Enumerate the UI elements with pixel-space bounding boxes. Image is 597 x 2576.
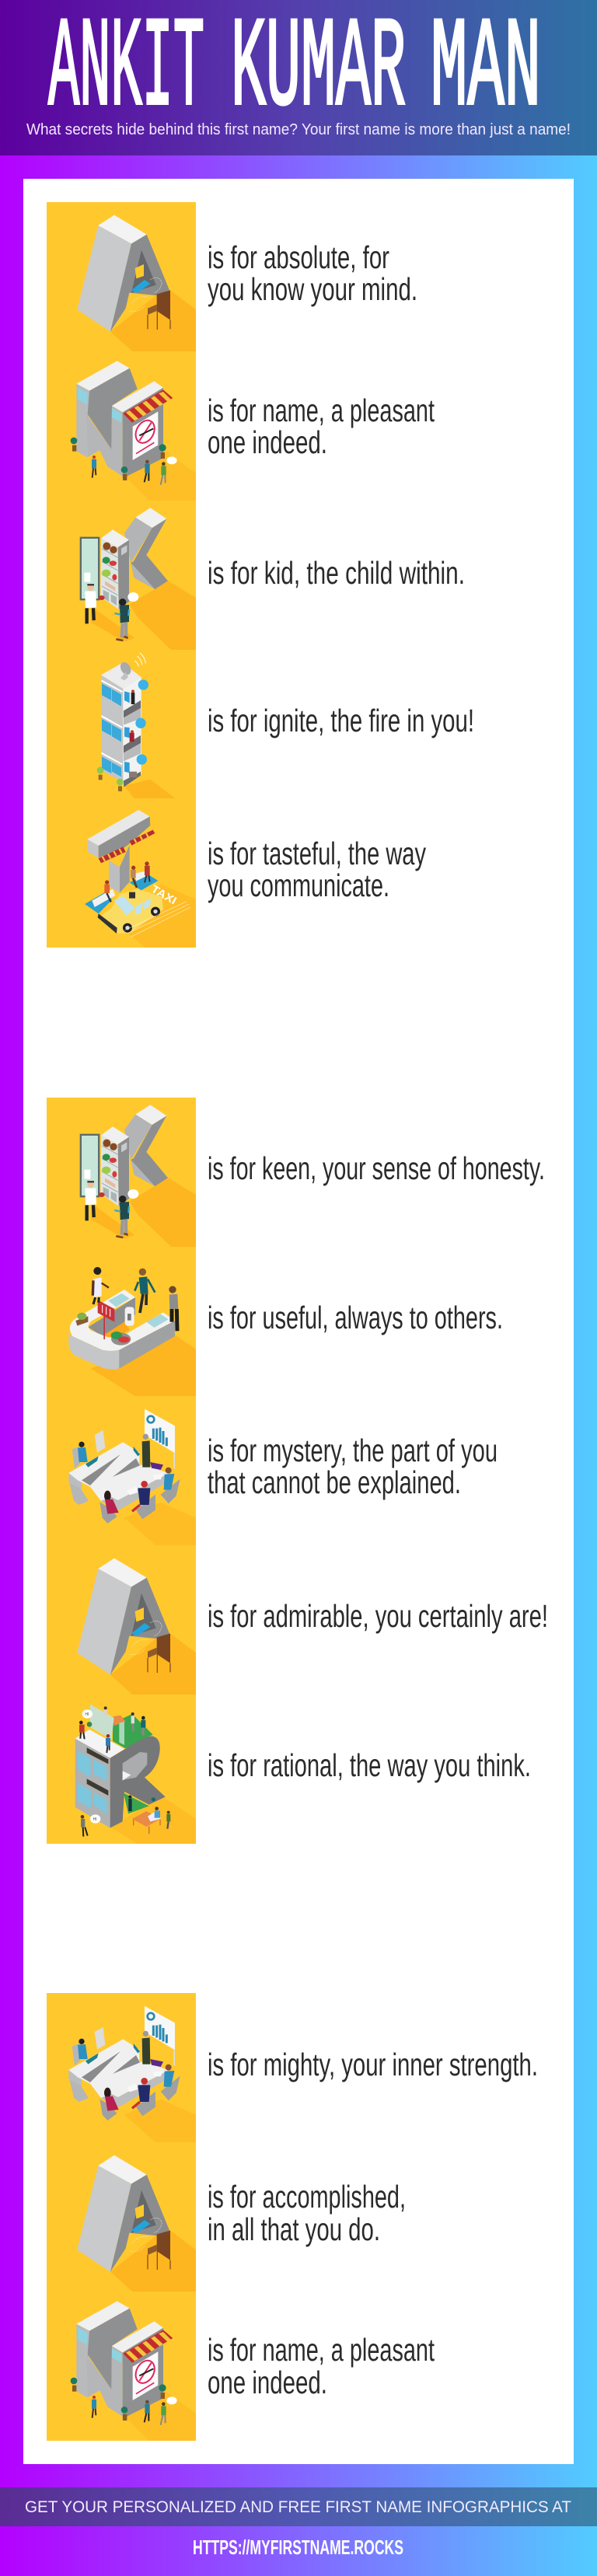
row: T is for tasteful: you communicate. bbox=[208, 867, 389, 903]
row: A is for absolute bbox=[47, 202, 417, 351]
header band bbox=[0, 0, 597, 155]
row: I is for ignite bbox=[47, 650, 474, 799]
row: N is for name: one indeed. bbox=[208, 424, 327, 460]
footer band bbox=[0, 2487, 597, 2526]
row: K is for keen bbox=[47, 1098, 545, 1247]
title: ANKIT bbox=[48, 0, 204, 141]
row: I is for ignite: is for ignite, the fire in you! bbox=[208, 703, 474, 738]
row: A is for accomplished bbox=[47, 2142, 406, 2292]
section: ANKIT bbox=[47, 202, 474, 948]
row: N is for name: is for name, a pleasant bbox=[208, 393, 435, 428]
row: M is for mystery: that cannot be explained. bbox=[208, 1464, 461, 1500]
row: N is for name bbox=[47, 2292, 435, 2441]
footer call to action: GET YOUR PERSONALIZED AND FREE FIRST NAME INFOGRAPHICS AT bbox=[25, 2498, 571, 2516]
row: A is for admirable bbox=[47, 1545, 548, 1695]
row: K is for kid: is for kid, the child within. bbox=[208, 555, 465, 591]
row: T is for tasteful bbox=[47, 798, 426, 948]
section: KUMAR bbox=[47, 1098, 548, 1844]
subtitle: What secrets hide behind this first name? Your first name is more than just a name! bbox=[26, 121, 571, 138]
section: MAN bbox=[47, 1993, 538, 2441]
row: A is for absolute: you know your mind. bbox=[208, 271, 417, 307]
row: N is for name: one indeed. bbox=[208, 2365, 327, 2400]
row: N is for name bbox=[47, 351, 435, 501]
row: K is for kid bbox=[47, 501, 465, 650]
row: M is for mighty bbox=[47, 1993, 538, 2142]
row: R is for rational bbox=[47, 1695, 531, 1844]
row: N is for name: is for name, a pleasant bbox=[208, 2332, 435, 2368]
footer URL: HTTPS://MYFIRSTNAME.ROCKS bbox=[193, 2536, 403, 2559]
row: A is for accomplished: is for accomplished, bbox=[208, 2179, 406, 2215]
row: A is for accomplished: in all that you do. bbox=[208, 2211, 380, 2247]
row: T is for tasteful: is for tasteful, the way bbox=[208, 836, 426, 871]
row: M is for mystery bbox=[47, 1396, 498, 1545]
row: A is for absolute: is for absolute, for bbox=[208, 239, 389, 275]
row: U is for useful bbox=[47, 1247, 503, 1396]
